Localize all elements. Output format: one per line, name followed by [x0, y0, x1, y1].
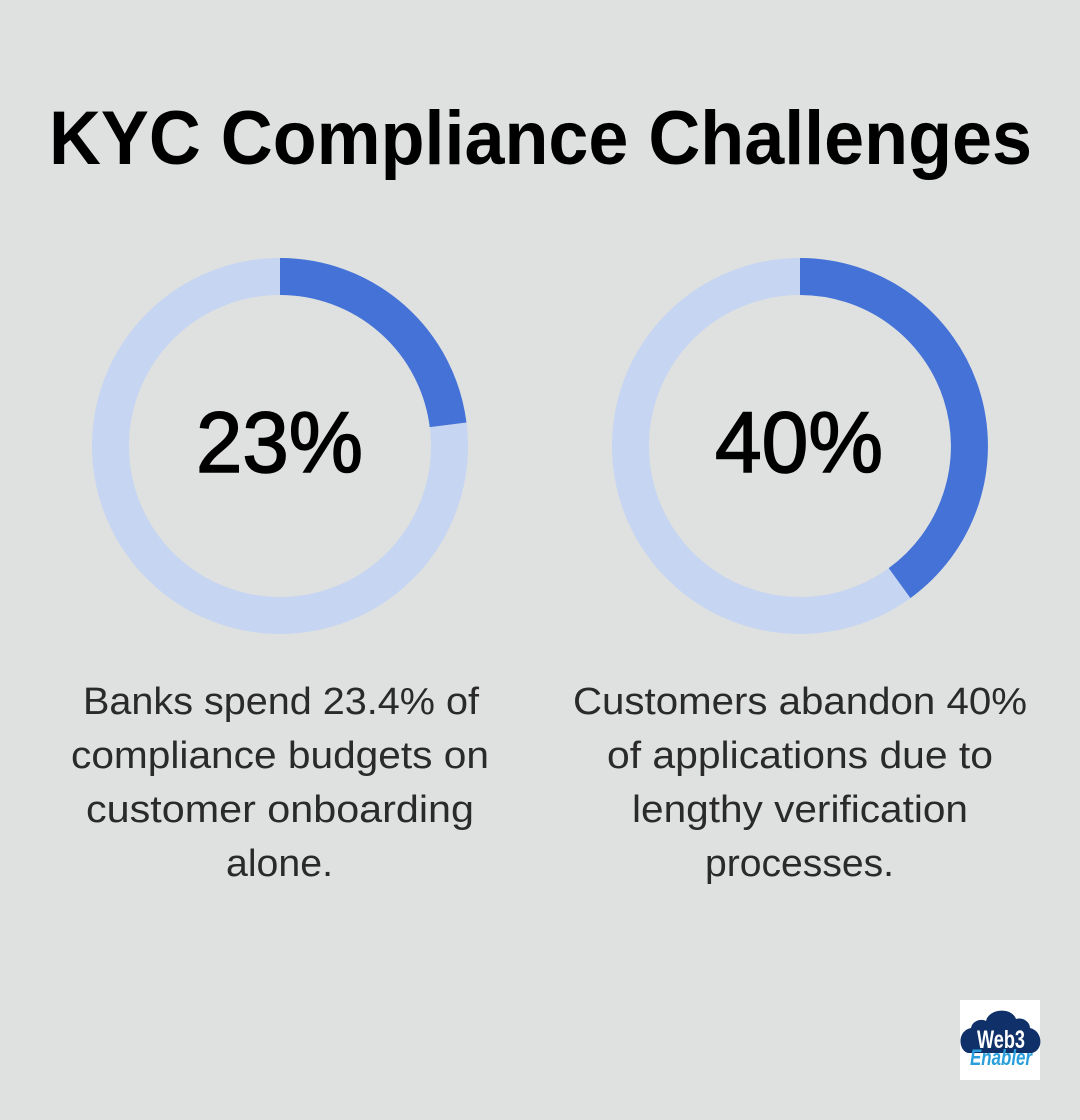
title: KYC Compliance Challenges: [49, 96, 1032, 181]
value: 23%: 23%: [196, 395, 363, 491]
donut chart: 40%: [630, 276, 970, 616]
text block: abandoned applications: lengthy verification: [632, 789, 968, 831]
text block: abandoned applications: of applications due to: [607, 735, 993, 777]
text block: abandoned applications: Customers abandon 40%: [573, 681, 1027, 723]
donut chart: 23%: [110, 276, 450, 616]
text block: abandoned applications: [573, 681, 1027, 885]
text block: abandoned applications: processes.: [705, 843, 894, 885]
text block: bank budgets: Banks spend 23.4% of: [83, 681, 479, 723]
text block: bank budgets: [71, 681, 489, 885]
logo: Web3 Enabler: Enabler: [970, 1045, 1033, 1070]
text block: bank budgets: customer onboarding: [86, 789, 474, 831]
logo: Web3 Enabler: [960, 1000, 1040, 1080]
text block: bank budgets: alone.: [226, 843, 333, 885]
logo: Web3 Enabler: Web3: [977, 1026, 1025, 1054]
value: 40%: 40%: [715, 395, 883, 491]
text block: bank budgets: compliance budgets on: [71, 735, 489, 777]
